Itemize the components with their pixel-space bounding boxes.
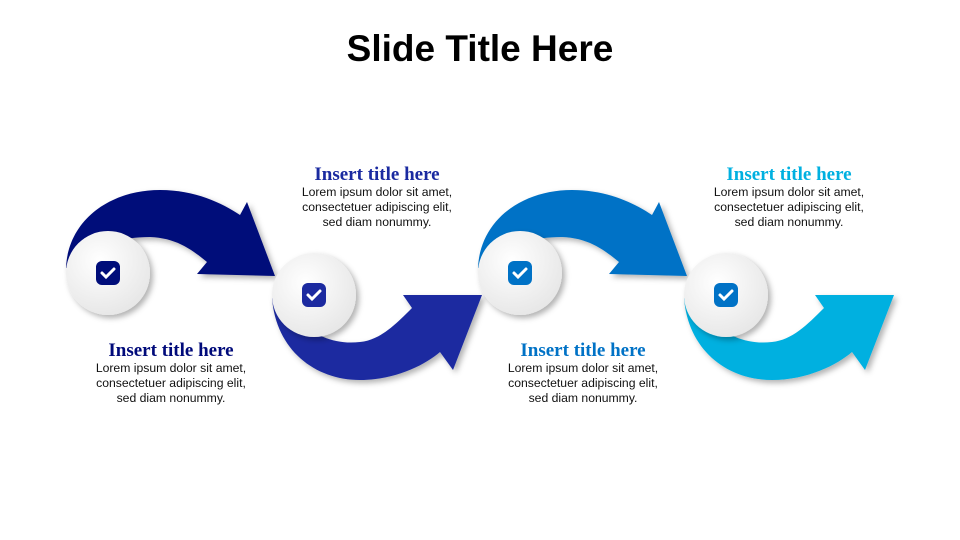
- text: step 1: Lorem ipsum dolor sit amet,: [96, 361, 246, 375]
- text: step 1: [96, 340, 246, 405]
- text: step 2: consectetuer adipiscing elit,: [302, 200, 452, 214]
- circle 2: [272, 253, 356, 337]
- text: step 4: Lorem ipsum dolor sit amet,: [714, 185, 864, 199]
- text: step 4: [714, 164, 864, 229]
- arrow 2: [272, 295, 482, 380]
- text: step 1: sed diam nonummy.: [117, 391, 225, 405]
- arrow 4: [684, 295, 894, 380]
- text: step 4: Insert title here: [726, 164, 852, 185]
- text: step 3: Lorem ipsum dolor sit amet,: [508, 361, 658, 375]
- title: Slide Title Here: [347, 28, 613, 69]
- circle 4: [684, 253, 768, 337]
- arrow 1: [66, 190, 275, 276]
- circle 1: [66, 231, 150, 315]
- text: step 1: consectetuer adipiscing elit,: [96, 376, 246, 390]
- text: step 3: Insert title here: [520, 340, 646, 361]
- text: step 4: consectetuer adipiscing elit,: [714, 200, 864, 214]
- text: step 2: [302, 164, 452, 229]
- text: step 3: sed diam nonummy.: [529, 391, 637, 405]
- text: step 2: Insert title here: [314, 164, 440, 185]
- arrow 3: [478, 190, 687, 276]
- text: step 3: [508, 340, 658, 405]
- text: step 1: Insert title here: [108, 340, 234, 361]
- text: step 2: sed diam nonummy.: [323, 215, 431, 229]
- circle 3: [478, 231, 562, 315]
- text: step 2: Lorem ipsum dolor sit amet,: [302, 185, 452, 199]
- text: step 4: sed diam nonummy.: [735, 215, 843, 229]
- text: step 3: consectetuer adipiscing elit,: [508, 376, 658, 390]
